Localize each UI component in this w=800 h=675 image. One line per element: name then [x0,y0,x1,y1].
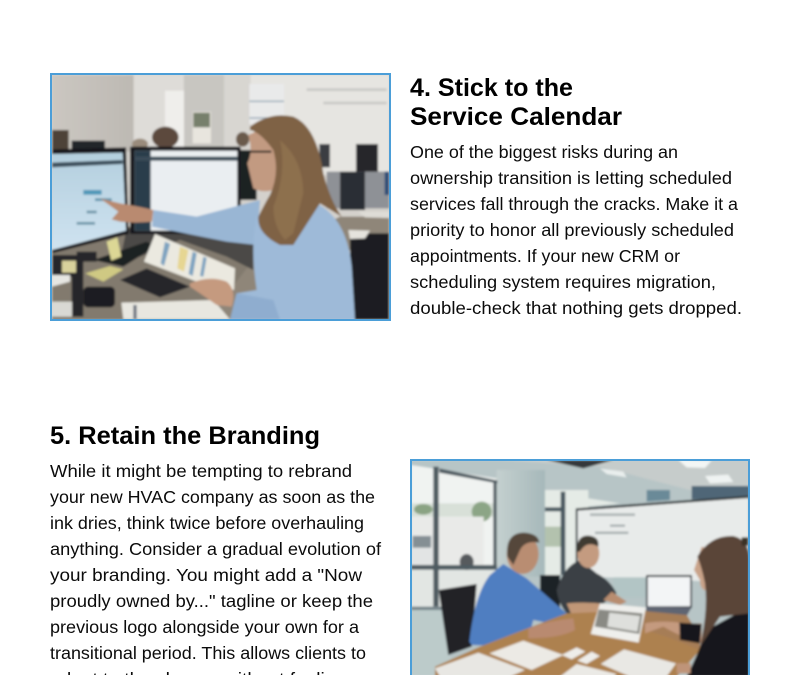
section 5 body text: transitional period. This allows clients to [50,643,366,663]
table [435,610,700,675]
section 5 body text: your new HVAC company as soon as the [50,487,375,507]
section 4 body text: appointments. If your new CRM or [410,246,680,266]
desk [52,227,265,320]
section 5 body text: proudly owned by..." tagline or keep the [50,591,373,611]
left monitor [52,147,129,253]
man 1 [469,564,567,645]
right monitor [130,147,241,234]
van card [591,603,646,643]
photo border [411,460,749,675]
section 4 body text: One of the biggest risks during an [410,142,678,162]
desk items [52,255,83,317]
hand pointing [100,198,153,222]
photo border [51,74,390,320]
section 4 body text: double-check that nothing gets dropped. [410,298,742,318]
laptop [646,575,692,608]
infographic page [50,73,750,675]
section 5 body text: previous logo alongside your own for a [50,617,359,637]
left wall and window [497,470,545,577]
section 5 body text: anything. Consider a gradual evolution of [50,539,381,559]
section 5 heading: 5. Retain the Branding [50,422,320,450]
chair [439,584,477,655]
section 4 heading: Service Calendar [410,103,622,131]
photo: office worker pointing at scheduling screen [50,73,392,322]
section 4 body text: priority to honor all previously scheduled [410,220,734,240]
photo: team meeting around a conference table [410,459,750,675]
section 5 body text [50,461,381,675]
section 4 heading: 4. Stick to the [410,74,573,102]
holding hand [190,279,233,307]
section 4 body text: ownership transition is letting scheduled [410,168,732,188]
section 5 body text: your branding. You might add a "Now [50,565,362,585]
section 5 body text: ink dries, think twice before overhauling [50,513,364,533]
dark cables behind desk [120,227,253,270]
middle window [545,490,588,575]
section 5 body text: While it might be tempting to rebrand [50,461,352,481]
binder [144,234,235,290]
clasped hands and forearm [528,618,575,638]
section 4 body text: scheduling system requires migration, [410,272,716,292]
glass low wall [618,576,646,580]
woman [645,622,702,643]
section 4 body text [410,142,742,318]
section 4 heading [410,74,622,131]
table papers [435,653,525,675]
ceiling [526,461,748,490]
section 4 body text: services fall through the cracks. Make it a [410,194,738,214]
man 2 [557,560,617,613]
hair and face [246,130,278,192]
whiteboard [577,497,748,583]
shirt and arm [152,200,260,245]
